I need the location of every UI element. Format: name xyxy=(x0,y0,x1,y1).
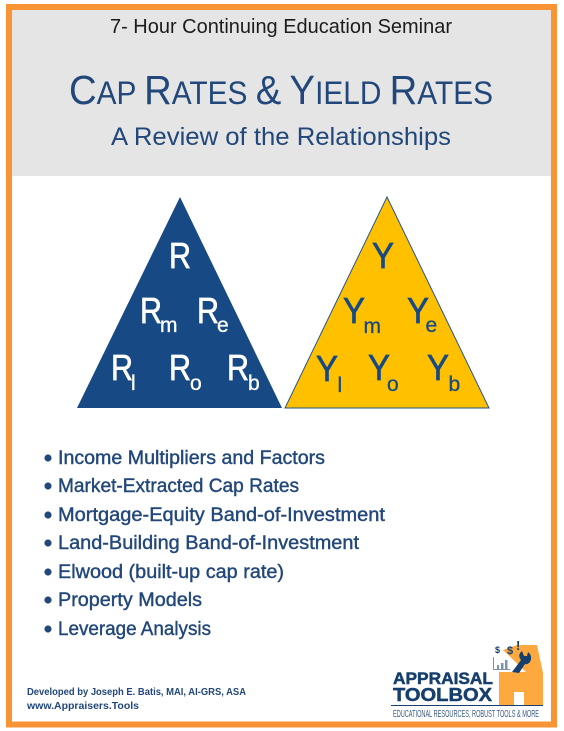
icon: dollar signs xyxy=(495,638,520,657)
blue triangle: cap rates: R xyxy=(227,347,249,388)
bullet list: Property Models xyxy=(58,590,202,611)
blue triangle: cap rates: o xyxy=(190,372,202,395)
blue triangle: cap rates: R xyxy=(111,347,133,388)
bullet list: Leverage Analysis xyxy=(58,619,211,640)
icon: dollar signs: ! xyxy=(516,638,520,653)
logo: Appraisal Toolbox xyxy=(391,638,543,720)
blue triangle: cap rates: R xyxy=(197,290,219,331)
header band xyxy=(12,10,551,176)
icon: house xyxy=(499,645,543,706)
yellow triangle: yield rates: m xyxy=(364,315,381,338)
author credit: www.Appraisers.Tools xyxy=(26,701,139,712)
blue triangle: cap rates: l xyxy=(131,372,136,395)
yellow triangle: yield rates: b xyxy=(448,373,460,396)
yellow triangle: yield rates: Y xyxy=(368,347,390,388)
blue triangle: cap rates xyxy=(77,197,282,408)
yellow triangle: yield rates: o xyxy=(387,373,399,396)
bullet list: Market-Extracted Cap Rates xyxy=(58,476,299,497)
blue triangle: cap rates: R xyxy=(169,347,191,388)
yellow triangle: yield rates: l xyxy=(338,374,342,397)
blue triangle: cap rates: m xyxy=(160,314,178,337)
logo rule xyxy=(391,705,543,706)
logo wordmark: APPRAISAL xyxy=(393,670,493,688)
yellow triangle: yield rates: Y xyxy=(407,290,429,331)
yellow triangle: yield rates xyxy=(285,197,489,408)
icon: bar chart xyxy=(493,657,510,670)
yellow triangle: yield rates: Y xyxy=(343,290,365,331)
yellow triangle: yield rates: Y xyxy=(372,235,394,276)
yellow triangle: yield rates: e xyxy=(426,314,437,337)
icon: wrench xyxy=(512,651,531,673)
logo wordmark xyxy=(393,670,493,705)
bullet list: Income Multipliers and Factors xyxy=(58,448,325,469)
blue triangle: cap rates: e xyxy=(217,314,229,337)
yellow triangle: yield rates: Y xyxy=(427,347,449,388)
author credit xyxy=(26,687,246,712)
title: CAP RATES & YIELD RATES xyxy=(69,67,493,113)
author credit: Developed by Joseph E. Batis, MAI, AI-GRS, ASA xyxy=(27,687,246,698)
blue triangle: cap rates: R xyxy=(169,235,191,276)
bullet list: Land-Building Band-of-Investment xyxy=(58,533,360,554)
subtitle: A Review of the Relationships xyxy=(111,123,451,151)
bullet list xyxy=(45,448,386,640)
bullet list: Mortgage-Equity Band-of-Investment xyxy=(58,505,386,526)
yellow triangle: yield rates: Y xyxy=(316,348,338,389)
bullet list: Elwood (built-up cap rate) xyxy=(58,562,284,583)
icon: dollar signs: $ xyxy=(495,645,500,655)
seminar line: 7- Hour Continuing Education Seminar xyxy=(110,16,452,38)
logo wordmark: TOOLBOX xyxy=(393,685,492,705)
blue triangle: cap rates: R xyxy=(140,290,162,331)
icon: dollar signs: $ xyxy=(507,645,513,657)
blue triangle: cap rates: b xyxy=(248,372,260,395)
